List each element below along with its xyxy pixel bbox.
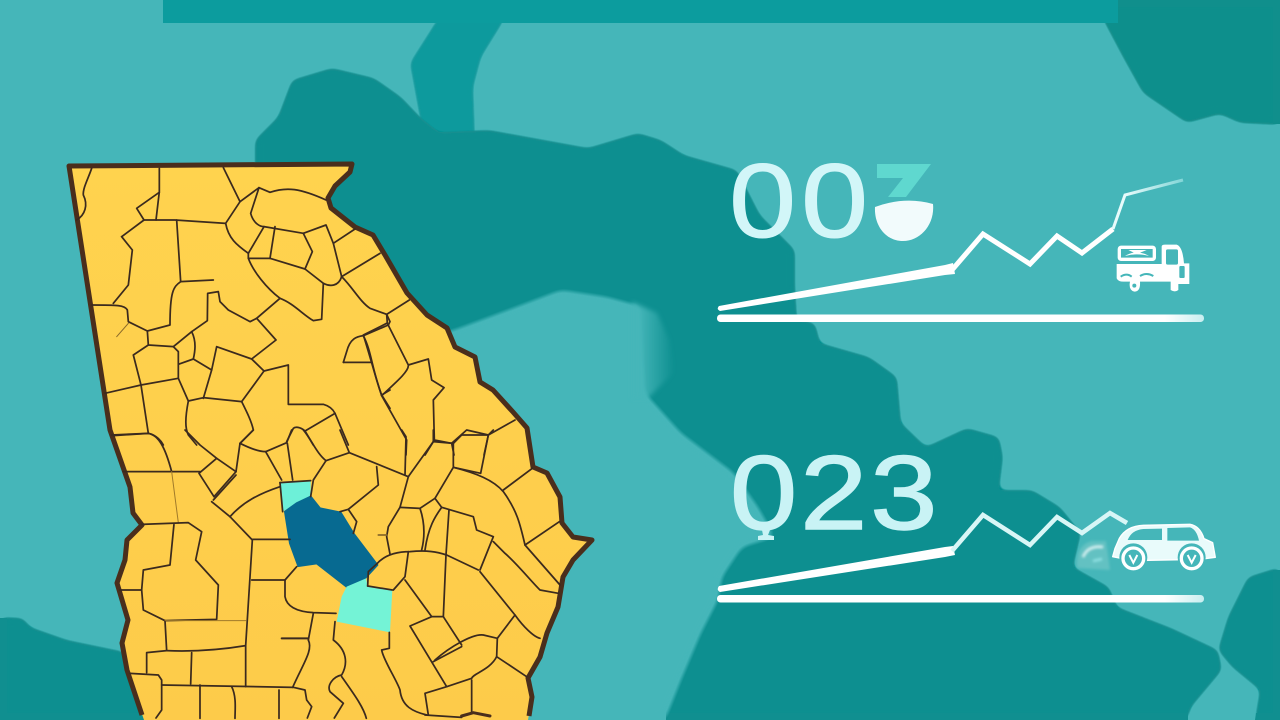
light lobe <box>400 290 775 720</box>
county lines north east <box>363 300 515 455</box>
main dark landmass <box>255 68 1222 720</box>
number 003: 00 <box>729 142 868 259</box>
lobe bottom edge <box>520 712 666 720</box>
lobe soft fade <box>632 302 674 398</box>
bottom right blob edges <box>1255 570 1280 720</box>
number 023: 023 <box>730 434 937 551</box>
top right blob <box>1095 0 1280 125</box>
map outline <box>69 164 592 716</box>
arm shape <box>410 0 512 145</box>
trend chart 2 <box>717 513 1204 602</box>
county lines south <box>112 430 560 718</box>
zigzag line <box>952 229 1113 270</box>
main landmass bottom edge <box>600 713 1188 720</box>
icon: truck <box>1117 245 1189 292</box>
balloon stem under zero <box>758 530 774 540</box>
bottom left blob <box>0 617 145 720</box>
county: dark blue and aqua highlights <box>280 481 392 632</box>
fading tail <box>1113 180 1183 229</box>
zigzag line <box>952 513 1127 551</box>
map fill <box>69 164 592 720</box>
bottom left blob edges <box>0 618 145 720</box>
stylised digit 3 <box>874 164 934 241</box>
icon: car <box>1113 524 1215 571</box>
trend chart 1 <box>717 180 1204 322</box>
top right blob edges <box>1100 0 1280 124</box>
baseline <box>717 314 1204 322</box>
icon: faded arc near car <box>1077 541 1110 570</box>
rising line <box>718 546 955 592</box>
map of Georgia <box>69 164 592 720</box>
number 003 <box>733 163 934 241</box>
bottom right blob <box>1218 567 1280 720</box>
baseline <box>717 595 1204 602</box>
top banner <box>163 0 1118 23</box>
county lines north west <box>77 168 390 445</box>
rising line <box>718 263 955 311</box>
stylised digit 3: 3 <box>873 142 940 259</box>
